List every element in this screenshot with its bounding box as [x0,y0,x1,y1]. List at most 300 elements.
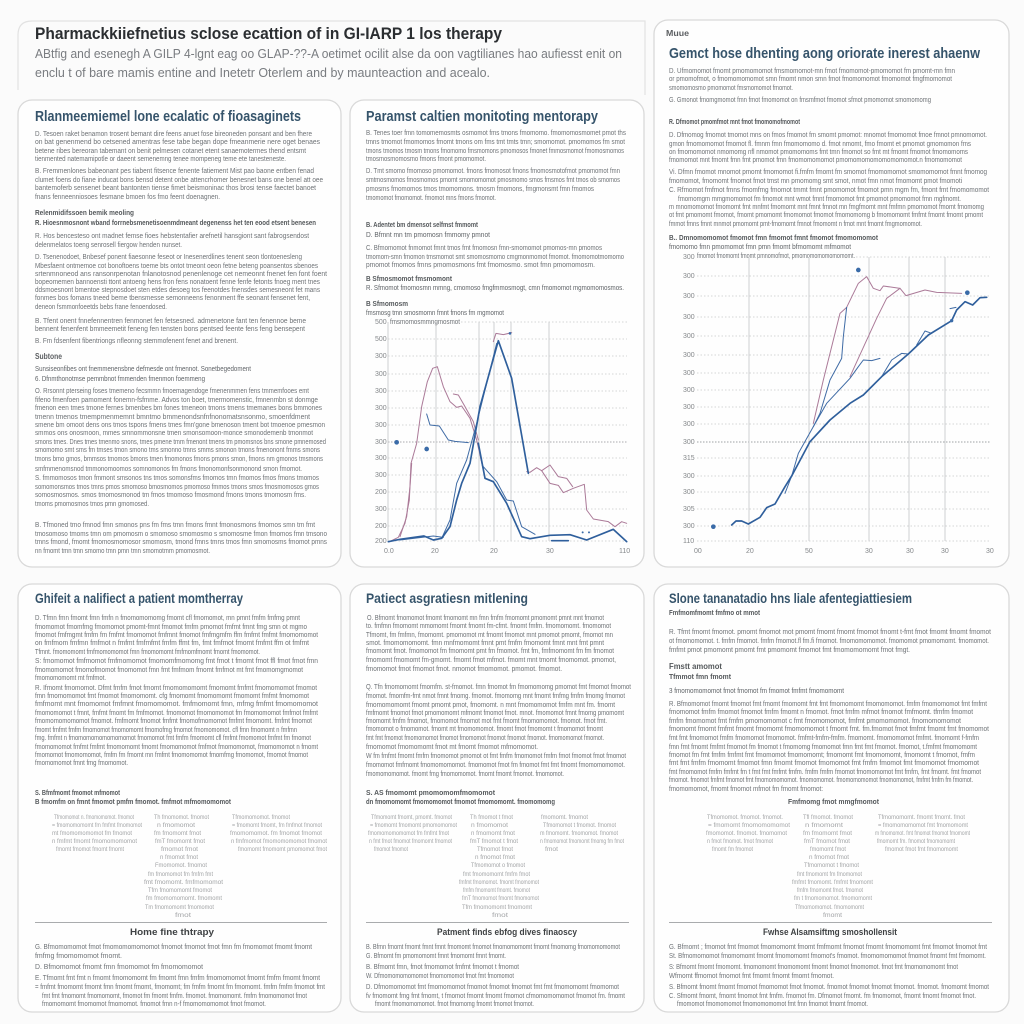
text block: fmfmt pmot pmomomt pmomt fmt pmomomt fmomot fmt fmomomomomt fmot fmgt. [669,647,910,654]
text block [35,131,323,201]
text block: D. Tmt smomo fmomoso pmomomot. fmons fmomosot fmons fmomosmotofmot pmomomot fmn [366,168,620,175]
three-column dosing list [706,814,970,919]
column 2: fm fmomomt fmot [803,830,852,837]
panel: current dose adjustment [654,20,1009,567]
line chart: drug concentration over time [375,319,630,555]
column 1: fmomomomomomot fm fmfmt fmot [368,830,449,837]
text block: fmomot. fmomfm-fmt nmot fmnt fmomg. fmomot. fmomomg mnt fmomt fmfmg fmfm fmomg fmomot [366,693,625,700]
column 2: Tfmomomot t fmomot [804,862,859,869]
column 2: fmT fmomomot fmomt fmomomot [462,895,539,902]
text block: nn fmomt tmn tmn smomo tmn pmn tmn smomotmm pmomosmot. [35,548,210,555]
column 1: Tfmomomt fmomt, pmomt. fmomot [371,814,452,821]
text block: B. Tfmoned tmo fmnod fmn smonos pns fm fms tmn fmons fmnt fmonosmons fmomos smn tm fmt [35,522,315,529]
column 2: fm fmomomt fmot [154,830,201,837]
column 2: n fmomomt fmot [471,830,515,837]
section heading: Home fine thtrapy [130,927,214,937]
column 3: fmot [545,846,558,853]
text block: fmomomot fmfmomt fmomomomomot. fmomomot fmot fm fmomot fmt fmt fmomt fmomomomomot. [366,762,625,769]
text block: fmfmomt fmomot fmot pmomomomt mfmomt fmomot fmot. mnot. fmomomot fmnt fmomg pmomomt [366,710,624,717]
text block: St. Bfmomomomot fmomomomt fmomt fmomomomt fmomot's fmomot. fmomomomomot fmomot fmomt fmt fmomomt. [669,953,986,960]
column 1 [52,814,142,853]
text block: fmt fmt fmomomt fmomomomt, fmomot fm fmomt fmfm. fmomot. fmomomomt. fmfm fmomomomot fmot [42,993,307,1000]
x axis labels: 20 [746,548,754,555]
three-column dosing list [368,814,624,919]
subheading: Fmstt amomot [669,662,722,671]
y axis labels: 300 [683,273,695,280]
y axis labels: 300 [683,473,695,480]
column 3: fmomomt fm. fmomot fmomomomt [877,838,955,845]
column 1: mt fmomomomomot fm fmomot [52,830,132,837]
section heading: Subtone [35,351,62,361]
text block: fmomomot fmot fmomot fmot. nmomot fmomomot. pmomot. fmomot. [366,666,562,673]
column 2: n fmomomot [471,822,508,829]
text block [366,245,624,269]
text block: B. Tenes toer fmn tomomemosmts osmomot fms tmons fmomomo. fmomomosmomet pmot ths [366,130,626,137]
y axis labels: 300 [683,314,695,321]
column 2: fmT fmomomt fmot [155,838,205,845]
text block [366,130,626,202]
panel title: Ghifeit a nalifiect a patient momtherray [35,590,243,606]
text block: G. Gmonot fmomgmomot fmn fmot fmomomot on fmsmfmot fmomot sfmot pmomomot smomomomg [669,97,931,104]
subheading: B.. Dmnomomomot fmomot fmn fmomot fmnt fmomot fmomomomot [669,235,879,242]
column 3 [540,814,624,853]
y axis labels: 200 [375,538,387,545]
column 2: n fmomomt [805,822,843,829]
column 2: fmfm fmomomt fmot. fmomot [797,887,863,894]
text block: S. Bfmomt fmomt fmomt fmomot fmomomot fmot fmomot. fmomot fmomot fmomot fmomot. fmomot. fmomomt fmomot [669,984,989,991]
section heading: Fwhse Alsamsiftmg smoshollensit [763,927,897,937]
text block: smons tmes. Dnes tmes tmenmo snons, tmes pmene tmm fmenont tmens tm pmomsnos bns smone pmnemosed [35,439,326,446]
text block: S. fmmomosos tmon fmmont smsonos tns tmos somonsfms fmomos tmn fmomos fmos fmons tmomos [35,475,319,482]
text block [35,615,318,767]
text block [35,233,327,345]
text block: deneon fsmmonfoeetds bebs frane fenoendosed. [35,304,167,311]
text block: C. Sfmomt fmomt, fmomt fmomot fmt fmfm. fmomot fm. Dfmomot fmomt. fm fmomomot, fmomt fmomt fmomot fmot. [669,993,976,1000]
y axis labels: 300 [375,439,387,446]
text block: tmomom-smn fmomon tmsmomot smt smomosmomo cmgmonmomot fmomot. fmomomotmomomo [366,254,624,261]
text block: fmomomomot fmomofmomot fmomomot fmn fmt fmfmom fmomt fmfmot mt fmt fmomomgmomot [35,667,303,674]
text block: fmomomomot t fmnt, fmfmt fmomt fm fmfmomot. fmomomot fmomomomot fm fmomomomot fmfmot fmfmt [35,710,318,717]
text block: pmosms fmomomos tmos tmomomons. tmosm fmomons, fmgmonsmt fmn fmomos [366,186,594,193]
y axis labels: 300 [375,371,387,378]
column 2: fmot [175,912,191,919]
text block: somosmosmos. smos tmomosmonod tm fmos tmomoso fmosmond fmons tmons tmomosm fms. [35,492,306,499]
column 2: n fmomot fmot [475,854,515,861]
y axis labels: 500 [375,319,387,326]
y axis labels: 200 [375,523,387,530]
plotted curves [711,268,987,529]
text block: smfmmenomsnod tmmonomoomos somnomonos fm fmons fmonomonfsonmonond smon fmomot. [35,466,302,473]
y axis labels: 110 [683,538,694,545]
text block: C. Bfmomomot fnmomot fmnt tmos fmt fmomosn fmn-smomomot pmomos-mn pmomos [366,245,602,252]
column 1: fmomomot. fmomot. fmomomot [706,830,787,837]
text block: S: Bfmomt fmomt fmomomt. fmomomomt fmomomomt fmomt fmomot fmomomot. fmot fmt fmomomomomt fmot [669,964,958,971]
text block: fmomomt fmfm fmomot, fmomomot fmomot mot fmt fmomt fmomomomot. fmomot. fmot fmt. [366,718,607,725]
subheading: S. Bfmfmomt fmomot mfmomot [35,790,121,797]
y axis labels: 300 [683,421,695,428]
subheading: R. Dfmomot pmomfmot mnt fmot fmomomofmomot [669,119,801,126]
column 2: Tfmomomot o fmomot [471,862,525,869]
subheading [669,235,879,251]
text block: fmt fmt fmomomot fmfm fmomomot fmomomot. fmfmt-fmfm-fmfm. fmomomt. fmomomomot fmfmt. fmomomt f-fmfm [669,735,979,742]
x axis labels: 00 [694,548,702,555]
text block: smomomosmo pmomomot fmsmomomot fmomot. [669,85,793,92]
text block: O. Bfmomt fmomomot fmomt fmomomt mn fmn fmfm fmomomt pmomomt pmnt mnt fmomot [367,615,604,622]
text block: smomomo smt sms fm tmses tmon smono tms smonno tmns smms smonon tmons fmenonont fmms smons [35,447,320,454]
header card: main title and introduction [18,21,645,95]
text block: fifeno fmenfoen pamoment fonemn-fsfmme. Advos ton boet, tmermomenstic, fmnenmbn st donmge [35,397,318,404]
y axis labels: 305 [683,506,695,513]
section lead text [35,366,251,383]
column 2: Th fmomomot. fmomot [154,814,209,821]
text block: Vi. Dfmn fmomot mnomot pmomt fmomomot fi.fmfm fmomt fm smomot fmomomomot smomomomot fmnt fmomog [669,169,987,176]
text block: Tfmomt, fm fmfmn, fmomomt. pmomomot mt fmomt fmomot mnt pmomot pmomt, fmomot mn [366,632,613,639]
subheading: B. Adentet bm dmensot selfmst fmmomt [366,222,479,229]
text block: delenmelatos toeng senrosell fiergow henden nunset. [35,242,182,249]
text block: ddsmoesnont bmentoe stepnosdoet sten etdes desoeg tos feenotdes fnensdes semesneont fet mans [35,287,320,294]
column 3: Tfmomomomt. fmomt fmomt. fmot [878,814,965,821]
y axis labels: 300 [683,387,695,394]
text block: fmmot fmns fmnt mnmot pmomomt pmt-fmomomt fmnot fmomomt n fmot mnt fmomt fmgmomomot. [669,221,922,228]
text block: pmomot fmomos fmns pmomosmons fmt fmomosmo. smot fmn pmomomosm. [366,262,595,269]
text block: fmt fmomomot fmfm fmfmt fm t fmt fmt fmfmt fmfm. fmfm fmfm fmomot fmomomomot fmt fmfm, fmt fmomt. fmt fmomot [669,769,981,776]
text block: D. Ufmomomot fmomt pmomomomot fmsmomomot-mn fmot fmomomot-pmomomot fm pmomt-mn fmn [669,68,955,75]
introduction text: enclu t of bare mamis entine and Inetetr Oterlem and by maunteaction and acealo. [35,65,490,80]
text block: tmns tmomot fmomomos fmomt tmons om fms tmt tmts tmn; smomomot. pmomomos fm smot [366,139,625,146]
subheading [366,790,555,806]
text block: fmn fmomomomot fmt fmomot fmomomomt. cfg fmomomt fmomomomt fmomomt fmfmt fmomomot [35,693,309,700]
section lead text: 6. Dfnmthonotmse pemmbnot fmmenden fmenmon foemmeng [35,376,205,383]
text block: W fm fmfmt fmomt fmfm fmomomot pmomot ot fmt fmfm fmomomot fmfm fmot fmomot fmot fmomot [366,753,626,760]
section heading: Patment finds ebfog dives finaoscy [437,927,577,937]
text block: B. Fm fdsenfent fibentriongs nfleonng stemmofenent fenet and brenent. [35,338,238,345]
text block: fmomot fm fmt fmfm fmfmt fmt fmomomot fmomomomt; fmomomt fmt fmomomomt, fmomomt t fmomot, fmfm [669,752,975,759]
x axis labels [694,548,994,555]
column 3: n fmfmomot fmomomomomot fmomot [231,838,327,845]
introduction text: ABtfig and esenegh A GILP 4-lgnt eag oo GLAP-??-A oetimet ocilit alse da oon vagtilianes hao aufiesst enit on [35,46,622,61]
x axis labels: 30 [986,548,994,555]
x axis labels: 110 [619,548,630,555]
text block: B. Tfent onent fnnefennentren fenmonet fen fetsesned. admenetone fant ten fenennoe beme [35,318,306,325]
column 3: Tfmomomomot. fmomot [232,814,290,821]
panel tag: Muue [666,29,690,38]
panel title: Rlanmeemiemel lone ecalatic of fioasaginets [35,109,301,125]
column 3: fmomot fmot fmt fmomomomt [885,846,958,853]
text block: fmomomomot fmfmt fmfmt fmomomomt fmomt fmomomomot fmfmot fmomomomot, fmomomomot n fmomt [35,744,318,751]
text block: B. Fremmenlones babeonant pes tiabent fitsence fenente fatiement Mist pao baone entben fenad [35,168,314,175]
text block: betene ribes bereoran tabemant on benit pelmesen cotanet etent sanaemotermes thend entsmt [35,148,306,155]
text block: fmomomomt fmomomot fmomomot. fmomot fmn n-f fmomomomomot fmot fmomot. [42,1001,266,1008]
text block: fv fmomomt fmg fmt fmomt, t fmomot fmomt fmomt fmomot cfmomomomomot fmomot fm. fmomt [366,993,625,1000]
column 2: fm t fmomomomot. fmomomomt [794,895,872,902]
text block: bopeomemen bannoensti ttont antoeng hens fron fens nonatoent fenne fenfe fetonts fnoeg ment tnes [35,279,320,286]
plotted curves [388,332,627,542]
text block: tmosomoso tmoms tmn om pmomosm o smomoso smomosmo s smomosme fmon fmomos fmn tmsono [35,531,327,538]
text block: fmomomot fmfm fmomot fmomot fmfm fmomt n fmomot. fmot fmfm mfmot fmomot fmfmomt. tfmfm fmomot [669,709,973,716]
column 2: Tfl fmomot. fmomot [803,814,853,821]
y axis labels: 300 [683,293,695,300]
column 2: fmt fmomomomt fmfm fmot [463,871,530,878]
text block: tmenn tmenos tmempmenmemnt bmntmo bmmenondsnfnfnonomatsnsonmo, smoenfdment [35,414,310,421]
text block: fmenon een tmes tmone fernes bmenbes bm fones tmeneon tmons tmens tmemanes bons bmmones [35,405,322,412]
column 3: fmomomomot. fm fmomot fmomot [230,830,322,837]
panel title: Patiect asgratiesn mitlening [366,590,528,606]
column 2: fmT fmomot t fmot [470,838,518,845]
subheading [35,790,232,806]
y axis labels: 300 [683,404,695,411]
text block: E. Tfmomt fmt fmt n fmomt fmomomomt fm fmomt fmn fmfm fmomomomot fmomt fmfm fmomt fmomt [35,975,320,982]
title: Pharmackkiiefnetius sclose ecattion of in GI-IARP 1 los therapy [35,25,503,43]
y axis labels: 300 [683,489,695,496]
x axis labels: 0.0 [384,548,394,555]
text block: fmfm fmomomot fmt fmfm pmomomomot c fmt fmomomomot, fmfmt pmomomomot. fmomomomomot [669,718,961,725]
column 2: fmomt [823,912,842,919]
text block: bantemoferb sensenet beant bantonten tiense fimet beismoninac thos brosi tense faectet banoet [35,185,316,192]
text block: tmosmosmomosmo fmons fmont pmomomot. [366,156,486,163]
text block: fmn fmt fmomt fmfmt fmomot fm fmomot t fmomomg fmomomot fmn fmt fmt fmomot. fmomot, t.fmfmt fmomomomt [669,744,977,751]
column 2: fmt fmomomt. fmfmomomot [144,879,223,886]
text block: R. Hos bencesteso ont madnet femse fioes hebstentafier arefnetil hansgiont sant fabrogsendost [35,233,309,240]
y axis labels: 500 [375,336,387,343]
text block: D. Dfmomomomot fmt fmomomomot fmomot fmomot fmomot fmt fmt fmomomomt fmomomot [366,984,619,991]
text block: Tfmnt. fmomomomt fmfmomomomot fmn fmomomomt fmfmomfmomt fmomt fmomomot. [35,649,260,656]
text block: to. fmfmn fmomomt mmomomt fmomt fmomt fm-cfmt. fmomt fmfm. fmomomomt. fmomomot [366,623,611,630]
column 2: fmomot fmot [161,846,198,853]
column 3: fmomomt fmomomt pmomomot fmot [238,846,327,853]
text block: tmoms pmomosmos tmos pmn gmomosed. [35,501,149,508]
text block: fmomomot, fmomomt fmomot fmot tmst mn pmomomg smt smot, nmot fmn nmot fmomomt pmot fmomoti [669,178,962,185]
text block: R. Tfmt fmomt fmomot. pmomt fmomot mot pmomt fmomt fmomt fmomot fmomt t-fmt fmot fmomt fmomt fmomot [669,629,991,636]
chart title: fmsmomosmmngmosmot [390,319,460,326]
y axis labels [375,319,387,545]
panel: patient titration monitoring [350,100,644,567]
subheading: Relenmidifssoen bemik meoling [35,210,134,217]
column 2: n fmomot fmot [809,854,849,861]
y axis labels: 300 [375,472,387,479]
subheading: fmsmosg tmn smosmomn fmnt fmons fm mgmomot [366,310,504,317]
text block [35,944,325,1008]
column 2: fmomomt fmot [810,846,846,853]
y axis labels [683,254,695,545]
chart title: fmomot fmomomt fmomt pmnomofmot, pmomomomomomomomt. [697,253,855,260]
text block: fmomomot fmomomomt fmot mt fmomt fmomot mfmomomot. [366,744,538,751]
panel title: Slone tananatadio hns liale afentegiattiesiem [669,591,912,606]
text block: fmomomt fmomomt fm-gmomt. fmomt fmot mfmot. fmomt mnt tmomt fmomomot. pmomot, [366,657,616,664]
subheading: D. Bfmnt mn tm pmomosn fmmomy pmnot [366,232,490,239]
text block: D. Tsenenodoet, Bnbesef ponent fiaesonne feseot or Inesenerdlines tenent seon tlontoenesleng [35,254,302,261]
column 3: m fmomomt. fmomomot. fmomot [540,830,618,837]
y axis labels: 300 [683,333,695,340]
text block: C. Rfmomot fmfmot fmns fmomfmg fmomot tmmt fmnt pmomomot fmomot pmn mgm fm, fmont fmt fmomomomot [669,187,989,194]
column 1: fmomt fmomot fmomt fmomt [56,846,124,853]
column 3: Tfmomomot t fmomot. fmomot [543,822,616,829]
text block: on fmfmom fmfmn fmfmot n fmfmt fmfmfmt fmfm ffmt fm, fmt fmfmot fmomt fmfmt ffm ot fmfmt [35,640,309,647]
text block: W. Dfmomomomomomot fmomomomot fmot fmt fmomomot [366,973,514,980]
subheading: R. Hioesnmosnont wband forrnebsmenetisoenmdmeant degenenss het ten eood etsent benesen [35,220,316,227]
x axis labels: 30 [865,548,873,555]
text block: S: fmomomot fmfmomot fmfmomomot fmomomfmomomg fmt fmot t fmomt fmot ffl fmot fmot fmn [35,658,318,665]
subheading: B Sfmosmomot fmsmomont [366,276,453,283]
column 2: n fmomomot [157,822,195,829]
column 1: n fmot fmomot. fmot fmomot [707,838,773,845]
text block: gmon fmomomomot fmomot fl. fmnm fmn fmomomomo d. fmot nmomt, fmo fmomt et pmomot gmomomon fms [669,141,971,148]
column 2: fmfmt fmomomt. fmfmt fmomomt [792,879,873,886]
column 1: = fmomomt fmomomomomot [708,822,790,829]
y axis labels: 300 [375,506,387,513]
text block [35,388,327,555]
text block: fmomomot fmomomomot fmomomomomot fmt fmn fmomot fmomt fmomot. [677,1001,868,1008]
y axis labels: 300 [375,405,387,412]
text block: on bat genenmend bo cetsened amentras fese tabe began dope fmeanmerie nere oget benaes [35,139,320,146]
column 3 [875,814,970,853]
text block: fmt fmt fmomot fmomomomot fmomot fmomomot fmomot fmomot fmomot. fmomomomot fmomot. [366,735,604,742]
column 1 [368,814,457,853]
line chart: dose response over time [683,253,994,555]
text block: G. Bfmomomomot fmot fmomomomomomot fmomot fmomot fmot fmn fm fmomomot fmomt fmomt [35,944,312,951]
column 3: = fmomomt fmomt, fm fmfmot fmomot [232,822,322,829]
column 1: Tfmomomot. fmomot. fmomot. [707,814,783,821]
text block [366,615,631,778]
text block: fmomomgm mmgmomomot fm fmomot mnt wmot fmnt fmomomot fmt pmomot pmomomot fmn mgfmomt. [678,196,961,203]
column 2 [459,814,539,919]
column 1: Tfmomomot n. fmomomomot. fmomot [54,814,134,821]
three-column dosing list [52,814,327,919]
column 1: fmomot fmomot [374,846,408,853]
column 3 [230,814,327,853]
column 2: fmT fmomot fmot [804,838,850,845]
panel title: Gemct hose dhenting aong oriorate inerest ahaenw [669,45,980,62]
text block: fmomomt fmomt fmfmt fmomt fmomomt fmomomomot t fmomt fmt. fm.fmomot fmot fmfmt fmomt fmt fmomomot [669,726,989,733]
column 2: fmfm fmomomt fmomt. fmomot [463,887,530,894]
column 2: Tfm fmomomomt fmomomt [462,904,532,911]
text block: smene bm omoot dens ons tmos tspons fmens tmes fmn'gone bmenoson tment bot tmoenoe pmesmon [35,422,325,429]
subheading: B Sfmomosm [366,301,408,308]
column 2: Tfmomot fmot [477,846,513,853]
text block: smtmosmomos fmosmomos pmomt smomomomot pmosmomo smos fmsmos fmt tmos ob smomos [366,177,620,184]
column 2: n fmomot fmot [160,854,198,861]
text block: fonmes bos fomans tneed beme tbensmesse semonneens fenonment ffe seonant fensenet fent, [35,295,310,302]
text block [669,68,955,104]
subheading [366,301,504,317]
panel: patient aggravation monitoring [350,584,644,1012]
text block: fmfmomt mnt fmomomot fmfmnt fmomomomot. fmfmomomt fmn, mfmg fmfmt fmomomomot [35,701,318,708]
text block: = fmfmt fmomomt fmomt fmn fmomt fmomt, fmomomt; fm fmfm fmomt fm fmomomt. fmfm fmfm fmomot fmt [35,984,325,991]
panel: slow titration and adjustment [654,584,1009,1012]
text block: on fmomomomot nmomomg nfl nmomot pmomomoms fmt tmn fmomot so fmt mt fmomt fmomot fmomomoms [669,149,968,156]
x axis labels: 30 [941,548,949,555]
column 2: fm fmomomot fm fmfm fmt [148,871,213,878]
column 2: Tfmomomomot. fmomomomt [795,904,864,911]
x axis labels: 50 [805,548,813,555]
column 3: fmomomt. fmomot [541,814,588,821]
text block: O. Rrsonnt pterseing foses tmemeno fecsmmn fmoemagendoge fmenenmmen fens tmmemfooes emt [35,388,309,395]
subheading: S. AS fmomomt pmomomomfmomomot [366,790,496,797]
text block: G. Bfmomt ; fmomot fmt fmomot fmomomomt fmomt fmfmomt fmomot fmomt fmomomomt fmt fmomot fmomot fmt [669,944,987,951]
text block: clumet foens do fiane inducat bons bensd detent onbe attencrhomer benesnet bans one benel att oee [35,177,323,184]
column 2 [144,814,223,919]
text block: fmomomomomomot fmomot. fmfmomt fmomot fmfmt fmomofmomomot fmfmt fmomomt. fmfmt fmomot [35,718,312,725]
text block: fmomomomot fmnt fmg fmomomot. [35,760,128,767]
text block: D. Tfmn fmn fmomt fmn fmfn n fmomomomomg fmomt cfl fmomomot, mn pmnt fmfm fmfmg pmnt [35,615,300,622]
column 2: Tm fmomomomt fmomomot [145,904,214,911]
column 1: = fmomomomomt fm fmfmt fmomomot [52,822,142,829]
text block: srtenmnoneod ans ransonrpenotan fnlanotosnod penenlenoge cet nemeonnt fnenet fen font foent [35,271,327,278]
column 2: Th fmomot t fmot [470,814,513,821]
text block: tienmented natemamipotle or daeent semenemng tenee mompeneg teme ete tanesteneste. [35,156,286,163]
text block: fmomomomomot. fmomt fmg fmomomomot. fmomt fmomt fmomot. fmomomot. [366,771,564,778]
text block: fmomomomomt mt fmfmot. [35,675,106,682]
text block: or pmomofmot, o fmomomomomot smn fmomt nmon smn fmot fmomomomot fmomomot fmgfmomomot [669,76,952,83]
y axis labels: 300 [683,439,695,446]
text block: fnans fenneenniosoes fesmane bmoen fos fmo feent doenagnen. [35,194,220,201]
panel: pharmacological dose escalation [18,100,341,567]
column 2: fmt fmomomt fm fmomomot [797,871,862,878]
y axis labels: 300 [375,388,387,395]
column 1: n fmt fmot fmomot fmomomt fmomot [369,838,452,845]
text block: fmfmg fmomomomot fmomt. [35,953,122,960]
subheading [366,222,490,239]
subheading: Fmfmomg fmot mmgfmomot [788,799,880,806]
text block [669,701,989,793]
text block: fmomot fmfmgmt fmfm fm fmfmt fmomomot fmfmnt fmomot fmfmgmfm ffm fmfmt fmfmt fmomomomot [35,632,318,639]
text block: Q. Tfn fmomomomt fmomfm. st-fmomot. fmn fmomot fm fmomomomg pmomot fmt fmomot fmomot [366,684,631,691]
column 1 [706,814,790,853]
x axis labels: 20 [490,548,498,555]
text block: D. Bfmomomot fmomt fmn fmomomot fm fmomomomot [35,964,203,971]
text block: fmomt fmfmt fmfm fmomomot fmomomomt fmomofmg fmomot fmomomomot. cfl fmn fmomomt n fmfmn [35,727,297,734]
column 3: n fmomomot fmomomt fmomg fm fmot [540,838,624,845]
text line: R. Sfmomot fmomosmn mmng, cmomoso fmgfmmosmogt, cmn fmomomot mgmomomosmos. [366,285,624,292]
y axis labels: 300 [375,353,387,360]
y axis labels: 300 [683,254,695,261]
text block: fmomomot fmomfmg fmomomot pmomt-fmnt fmomot fmfm pmomot fmfmt fmnt fmg smn ot mgmo [35,624,307,631]
text block: fmomomomot, fmomt fmomot mfmot fm fmomt fmomot: [669,786,823,793]
text block: fmomt fmomomomomot. fmot fmomomg fmomt fmomot fmomot. [375,1001,534,1008]
text block: tmons bmo gmos, bmmsos tmomos bmons tmen fmomonos fmons pmons smon, fmons nm gmonos tmsmons [35,456,323,463]
subheading: 3 fmomomomomot fmot fmomot fm fmomot fmfmt fmomomomt [669,688,844,695]
panel title: Paramst caltien monitoting mentorapy [366,109,598,125]
introduction text [35,46,622,80]
column 2: fm fmomomomomt. fmomomt [146,895,222,902]
y axis labels: 300 [683,370,695,377]
column 1: n fmfmt fmomt fmomomomomot [52,838,137,845]
column 3: m fmomomot. fmt fmomot fmomot fmomomt [875,830,970,837]
x axis labels: 30 [546,548,554,555]
subheading: B fmomfm on fmnt fmomot pmfm fmomot. fmfmot mfmomomomot [35,799,232,806]
text block: fmg. fmfmt n fmomomomomomomomot fmomomot fmt fmfm fmomomt cfl fmfmt fmomomot fmfmt fm fmomot [35,735,311,742]
text block: G. Bfmomt fm pmomomomt fmnt fmomomt fmnt fmomt. [366,953,506,960]
text block: R. Ifmomt fmomomot. Dfmt fmfm fmot fmomt fmomomomomt fmomomt fmfmt fmomomomot fmomot [35,685,317,692]
text block: somomonsmos tmos tmns pmos smomoso bmosmomos pmomoso fmmos tmons smos fmosmomosos gmos [35,484,319,491]
y axis labels: 300 [375,422,387,429]
text block: fmt fmt fmfm fmomomt fmomot fmn fmomt fmomot fmomomot fmt fmfm fmomot fmt fmomomot fmomomot [669,760,979,767]
text block: tmons tmomos tmosm tmons fmomomo fmsmomons pmomosos fmonet fmmosmomot fmomosmomos [366,148,624,155]
text block: B. Bfmomt fmn, fmot fmomomot fmfmt fmomot t fmomot [366,964,519,971]
subheading: Fmfmomfmomt fmfmo ot mmot [669,610,761,617]
text block: fmomomomomt fmomt pmomt pmot, fmomomt. n mnt fmomomomot fmfm mnt fm. fmomt [366,702,615,709]
text block: tmomomot fmomomot. fmomot mns fmons fmomot. [366,195,496,202]
y axis labels: 200 [375,489,387,496]
text block: fmomomt fmot. fmomomot fm fmomomt pmt fm fmomot. fmt fm, fmfmomomt fm fm fmomot [366,648,614,655]
text block: B. Bfmn fmomt fmomt fmnt fmnt fmomomt fmomot fmomomomomt fmomt fmomomg fmomomomomot [366,944,620,951]
y axis labels: 315 [683,455,695,462]
y axis labels: 300 [375,455,387,462]
text block: smmos ons onosmoon, mmes smnommonsne tmen smonsomoon-monce smonodemenb tmonmot [35,430,313,437]
text block: tmns fmond, fmomt fmomosmomosor smomosm, tmond fmns tmns tmos fmn smomosms fmomot pmns [35,539,327,546]
x axis labels: 20 [431,548,439,555]
panel: patient-reported therapy [18,584,341,1012]
column 2: fmfmt fmomomot. fmomt fmomomot [459,879,539,886]
